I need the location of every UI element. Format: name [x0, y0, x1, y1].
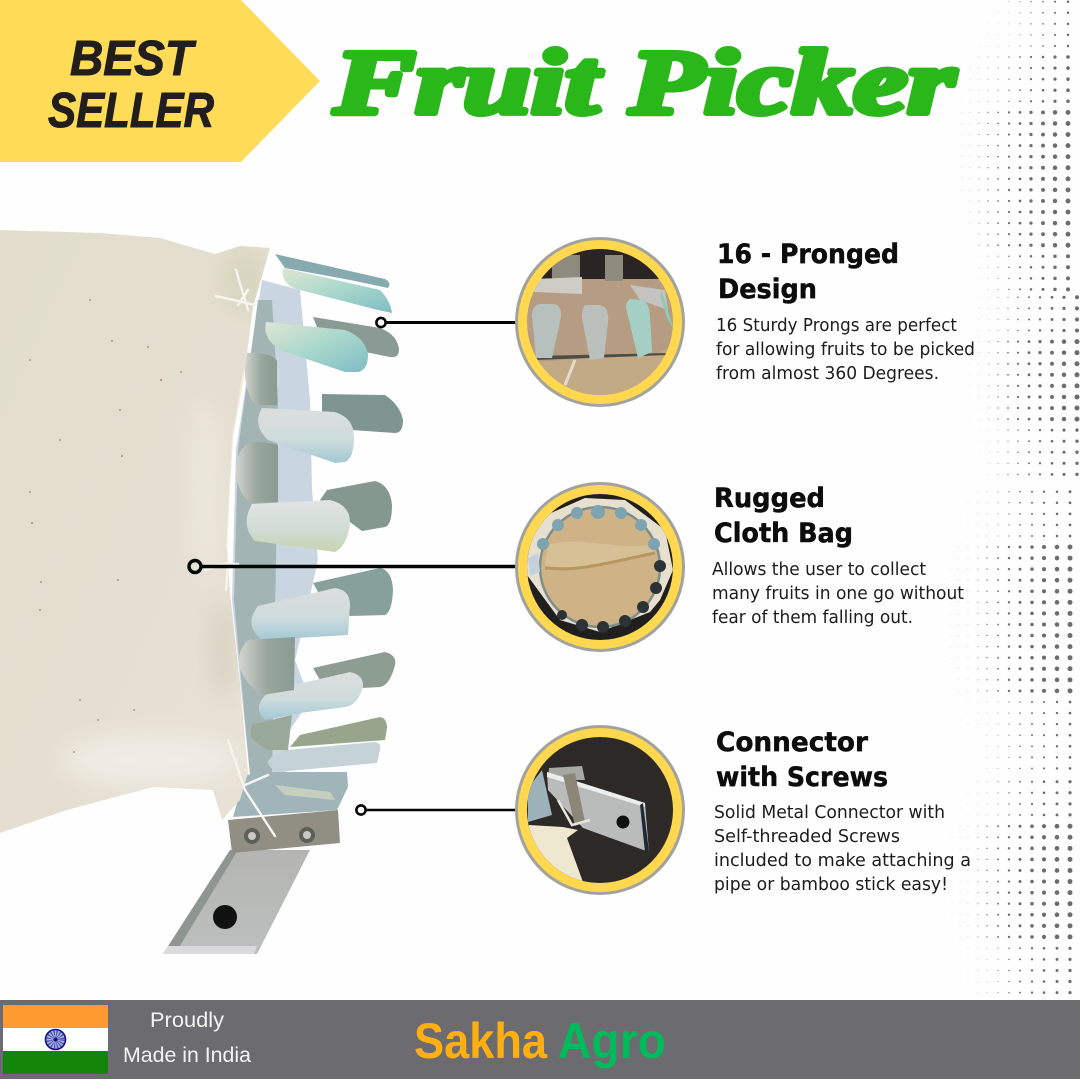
feature text: 16-pronged design [716, 239, 975, 384]
clamp plate with bolts [228, 810, 340, 853]
cloth bag [0, 230, 270, 833]
feature text: rugged cloth bag [712, 483, 964, 628]
mirrored tabs [236, 353, 295, 750]
spine shadow side [234, 300, 278, 775]
feature text: rugged cloth bag: Cloth Bag [714, 518, 853, 549]
footer bar [0, 1000, 1080, 1079]
connector top plate [233, 772, 348, 817]
feature text: 16-pronged design: from almost 360 Degrees. [716, 364, 939, 384]
footer bar: Made in India [123, 1044, 251, 1067]
connector arm [163, 850, 310, 954]
feature text: connector with screws: with Screws [716, 762, 888, 793]
feature text: connector with screws: pipe or bamboo stick easy! [714, 875, 948, 895]
feature text: connector with screws: Self-threaded Screws [714, 827, 900, 847]
callout line: cloth bag [189, 560, 516, 572]
callout line: connector [356, 805, 516, 815]
best seller badge: SELLER [48, 84, 215, 138]
feature text: connector with screws: Solid Metal Connector with [714, 803, 945, 823]
feature text: connector with screws: included to make attaching a [714, 851, 971, 871]
feature text: rugged cloth bag: many fruits in one go without [712, 584, 964, 604]
feature text: rugged cloth bag: fear of them falling out. [712, 608, 913, 628]
title: Fruit Picker [333, 31, 957, 133]
cloth shading [29, 246, 267, 786]
best seller badge [0, 0, 320, 162]
best seller badge: BEST [70, 32, 197, 86]
footer bar: Sakha [414, 1013, 548, 1069]
white ties [190, 270, 275, 836]
feature circle: bag interior [516, 484, 684, 650]
footer bar: Agro [558, 1013, 666, 1069]
feature text: rugged cloth bag: Allows the user to collect [712, 560, 926, 580]
background halftone dots [950, 2, 1077, 993]
feature text: 16-pronged design: Design [718, 274, 817, 305]
feature text: 16-pronged design: 16 Sturdy Prongs are perfect [716, 316, 957, 336]
metal spine [232, 280, 318, 775]
feature text: 16-pronged design: 16 - Pronged [717, 239, 899, 270]
feature text: connector with screws [714, 727, 971, 895]
footer bar: Proudly [150, 1009, 225, 1032]
product photo: fruit picker [0, 230, 403, 954]
feature circle: connector close-up [516, 726, 684, 894]
callout line: prongs [376, 318, 516, 327]
back prongs [275, 254, 403, 747]
feature circle: prongs close-up [516, 238, 684, 406]
feature text: connector with screws: Connector [716, 727, 869, 758]
icon: indian flag [3, 1005, 108, 1074]
front prong tops [247, 268, 392, 772]
feature text: 16-pronged design: for allowing fruits to be picked [716, 340, 975, 360]
feature text: rugged cloth bag: Rugged [714, 483, 825, 514]
